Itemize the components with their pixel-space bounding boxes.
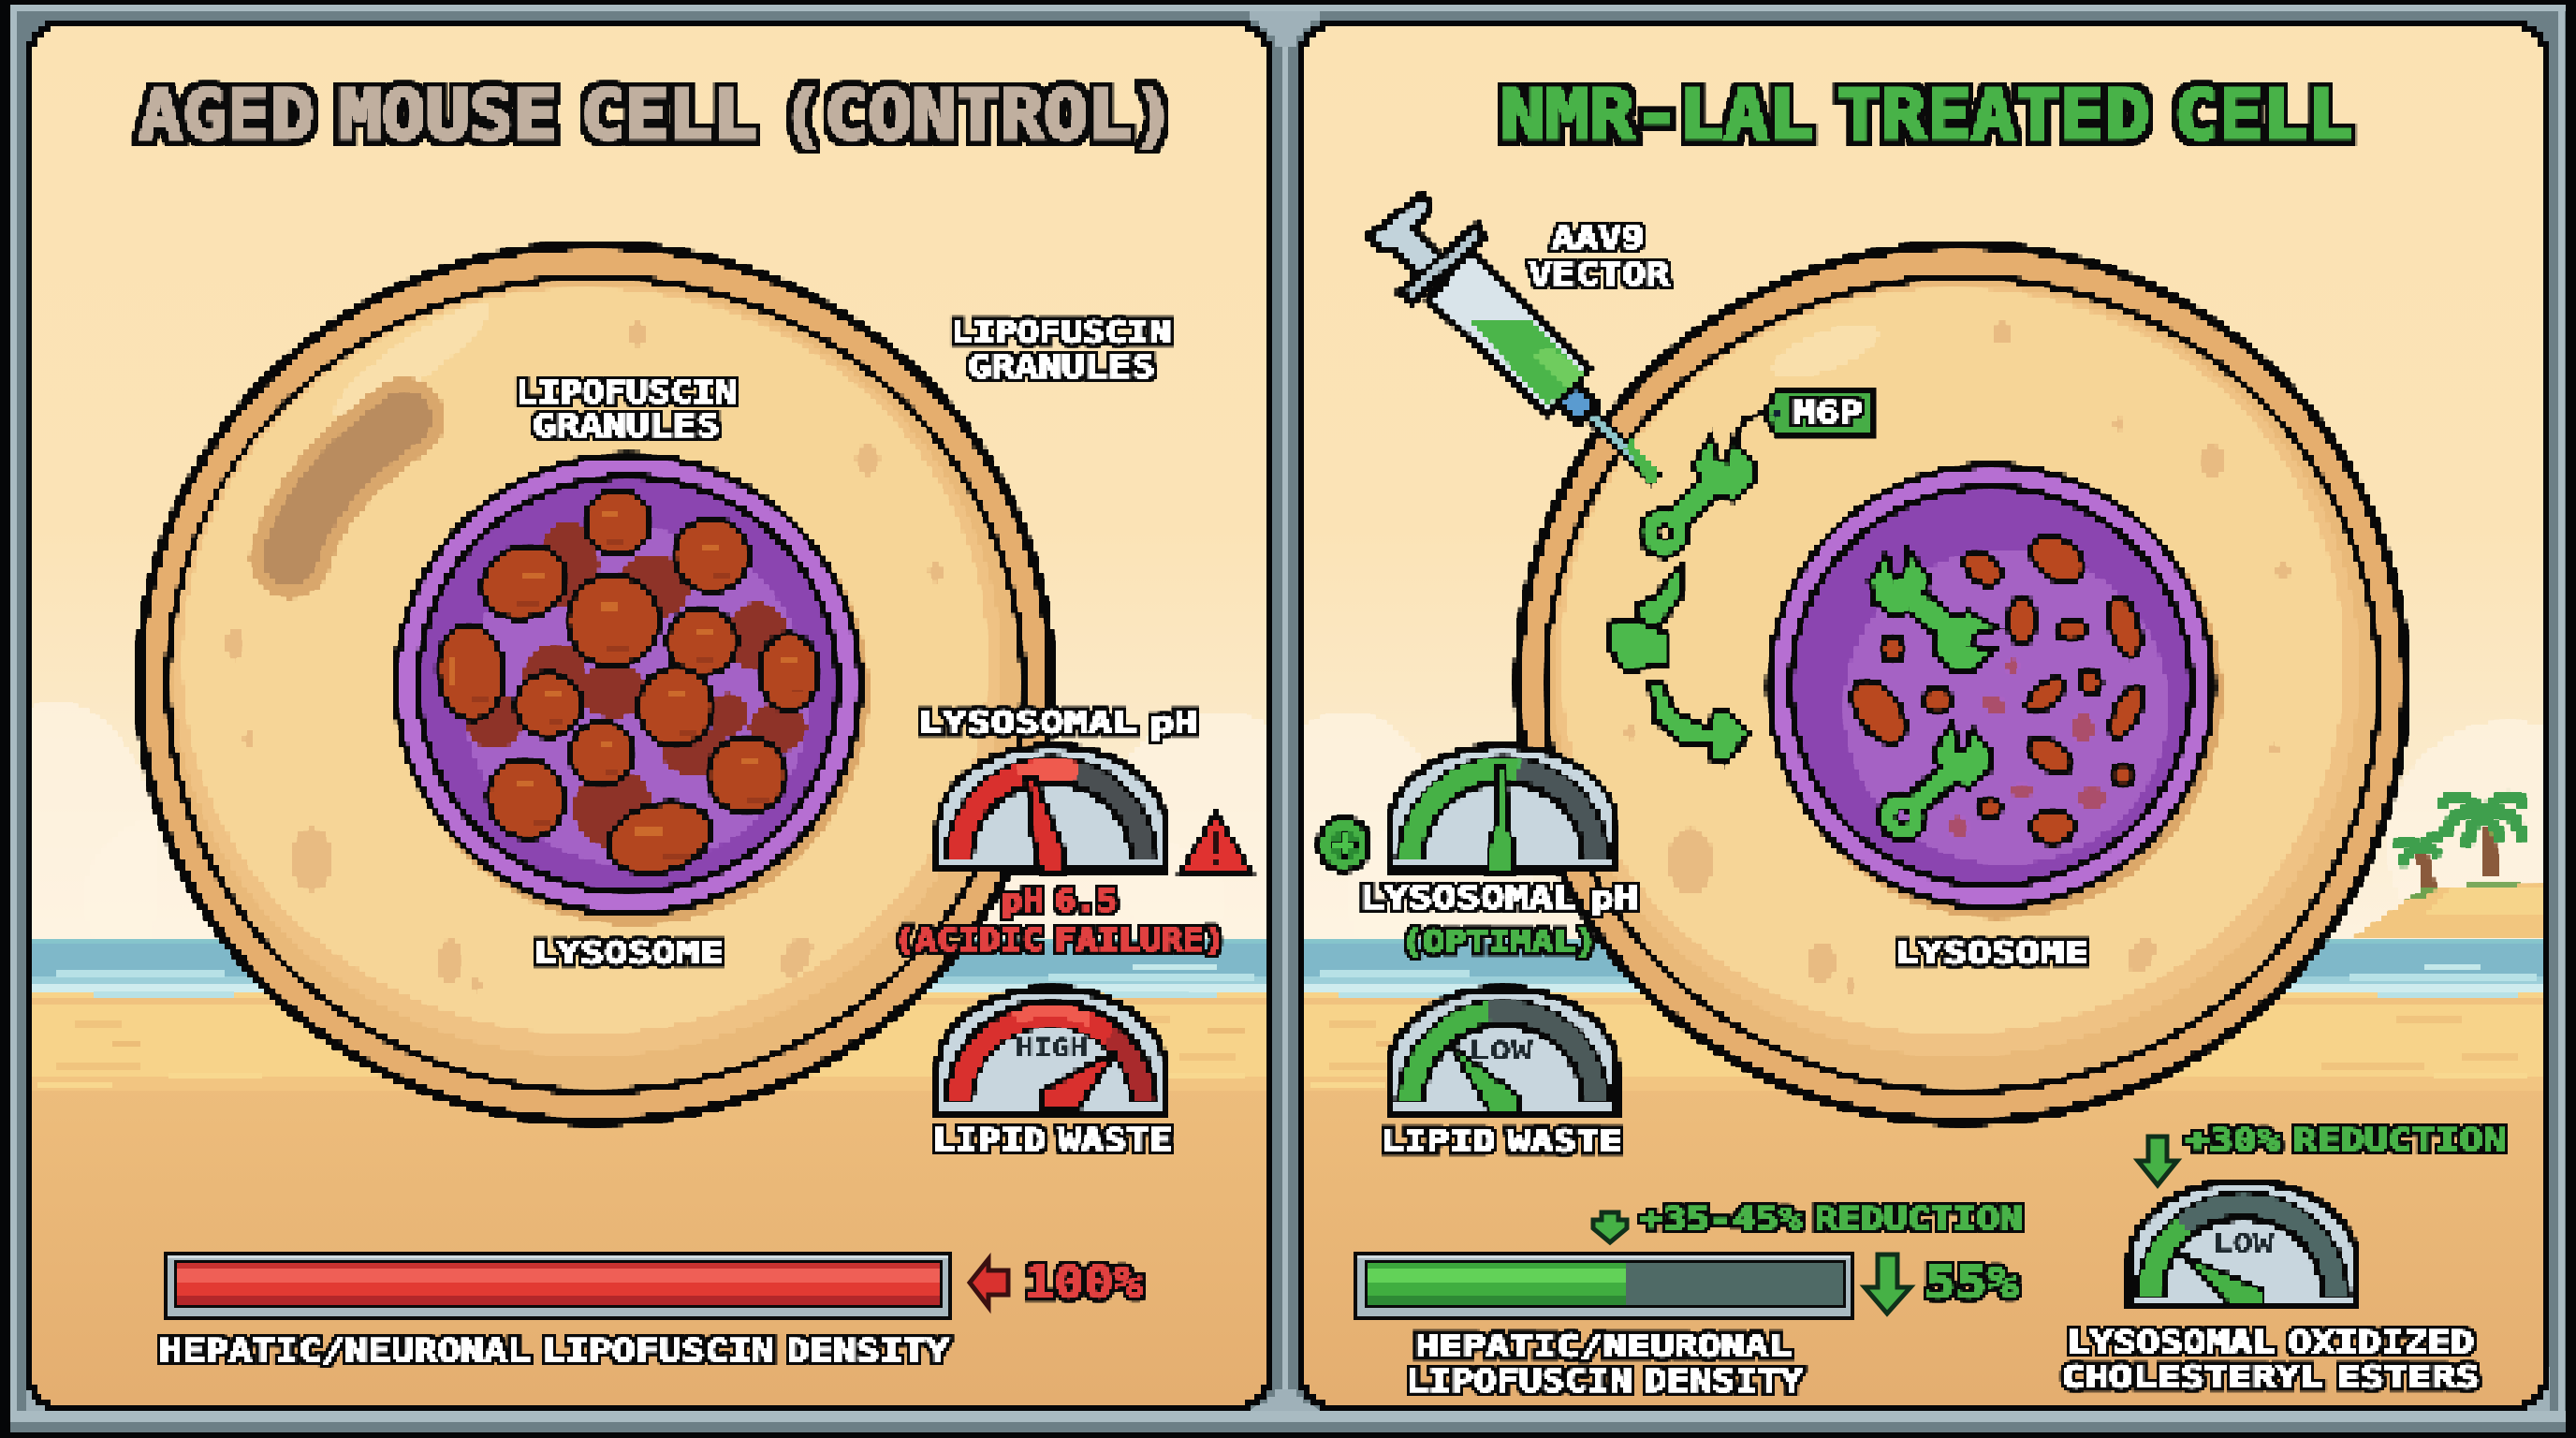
labels right	[1360, 219, 2507, 1399]
value: 55 percent: 55%	[1925, 1257, 2018, 1309]
cytoplasm specks right	[1624, 320, 2291, 993]
label: lysosomal pH optimal	[1360, 879, 1638, 960]
cell artwork left	[135, 241, 1251, 1126]
broken granule fragments	[1841, 526, 2149, 844]
label: oxidized cholesteryl esters: CHOLESTERYL ESTERS	[2061, 1358, 2480, 1395]
gauge texts: low: LOW	[1469, 1036, 1533, 1065]
label: AAV9 vector: VECTOR	[1529, 256, 1669, 292]
label: AAV9 vector	[1529, 219, 1669, 292]
arrow: down 30 percent	[2138, 1137, 2177, 1185]
icon: wrench in lysosome upper	[1863, 547, 2001, 678]
arrow: into lysosome	[1649, 682, 1749, 764]
label: lysosome: LYSOSOME	[1895, 934, 2088, 971]
icon: enzyme fragment	[1608, 565, 1684, 671]
label: oxidized cholesteryl esters	[2061, 1324, 2480, 1395]
gauge texts: low: LOW	[2212, 1229, 2275, 1258]
readout: pH 6.5 acidic failure: pH 6.5	[1002, 882, 1118, 918]
progress bar: lipofuscin density 55 percent	[1354, 1252, 1854, 1320]
label: lipid waste: LIPID WASTE	[932, 1122, 1172, 1158]
gauge texts: low	[1469, 1036, 2275, 1258]
gauge: oxidized cholesteryl esters low	[2126, 1178, 2360, 1309]
arrow: red pointing left	[970, 1259, 1008, 1307]
label: AAV9 vector: AAV9	[1552, 219, 1645, 256]
label: lipofuscin granules inside: LIPOFUSCIN	[516, 374, 737, 410]
icon: plus badge	[1316, 815, 1372, 873]
cytoplasm specks left	[226, 320, 944, 992]
label: lipofuscin granules outside	[951, 314, 1171, 385]
label: oxidized cholesteryl esters: LYSOSOMAL OXIDIZED	[2067, 1324, 2474, 1360]
icon: tagged enzyme wrench in cytoplasm	[1627, 432, 1761, 565]
label: lipofuscin granules outside: LIPOFUSCIN	[951, 314, 1171, 350]
gauge text: high: HIGH	[1016, 1034, 1088, 1063]
island with palm trees	[2351, 796, 2546, 939]
label: density: HEPATIC/NEURONAL	[1415, 1328, 1792, 1364]
arrow: down 55 percent	[1865, 1255, 1910, 1313]
gauge: lipid waste high	[934, 985, 1168, 1116]
callout: 35-45 percent reduction: +35-45% REDUCTION	[1640, 1200, 2023, 1237]
panel: aged mouse cell control	[0, 22, 1329, 1409]
label: lysosome: LYSOSOME	[533, 934, 724, 971]
faded granule fragments	[1948, 659, 2107, 837]
label: density	[1406, 1328, 1803, 1399]
progress bar: lipofuscin density 100 percent	[164, 1252, 952, 1320]
callout: 30 percent reduction: +30% REDUCTION	[2186, 1122, 2507, 1158]
residual dark granules	[465, 521, 807, 848]
icon: warning triangle	[1180, 814, 1251, 873]
gauge: lipid waste low	[1386, 985, 1620, 1116]
readout: pH 6.5 acidic failure	[894, 882, 1225, 958]
lipofuscin granules	[434, 491, 819, 884]
cell membrane left	[135, 241, 1056, 1126]
tag text: M6P: M6P	[1793, 394, 1863, 431]
label: lysosomal pH: LYSOSOMAL pH	[918, 704, 1198, 741]
title: NMR-LAL treated cell: NMR-LAL TREATED CELL	[1500, 76, 2352, 155]
panel: NMR-LAL treated cell	[1245, 22, 2576, 1409]
lysosome left	[392, 451, 870, 926]
label: density: LIPOFUSCIN DENSITY	[1406, 1362, 1803, 1399]
label: lysosomal pH optimal: (OPTIMAL)	[1401, 923, 1597, 960]
tag: M6P	[1736, 390, 1875, 446]
readout: pH 6.5 acidic failure: (ACIDIC FAILURE)	[894, 921, 1225, 958]
cell artwork right	[1316, 195, 2410, 1309]
label: lipofuscin granules inside	[516, 374, 737, 444]
gauge: lysosomal pH control	[934, 742, 1168, 873]
arrow: down small	[1593, 1212, 1627, 1242]
icon: wrench in lysosome lower	[1867, 722, 1997, 847]
label: lysosomal pH optimal: LYSOSOMAL pH	[1360, 879, 1638, 916]
title: aged mouse cell: AGED MOUSE CELL (CONTROL)	[139, 76, 1176, 155]
organelle: mitochondrion	[290, 418, 404, 558]
label: density: HEPATIC/NEURONAL LIPOFUSCIN DENSITY	[159, 1332, 949, 1369]
gauge: lysosomal pH optimal	[1386, 742, 1620, 873]
label: lipid waste: LIPID WASTE	[1381, 1123, 1622, 1159]
lysosome right	[1765, 462, 2223, 919]
icon: syringe AAV9	[1369, 195, 1659, 485]
labels left	[159, 314, 1225, 1369]
beach background right	[1245, 22, 2576, 1409]
cell membrane right	[1514, 241, 2410, 1126]
label: lipofuscin granules outside: GRANULES	[968, 348, 1155, 385]
value: 100 percent: 100%	[1025, 1257, 1143, 1309]
beach background left	[0, 22, 1329, 1409]
label: lipofuscin granules inside: GRANULES	[533, 407, 720, 444]
